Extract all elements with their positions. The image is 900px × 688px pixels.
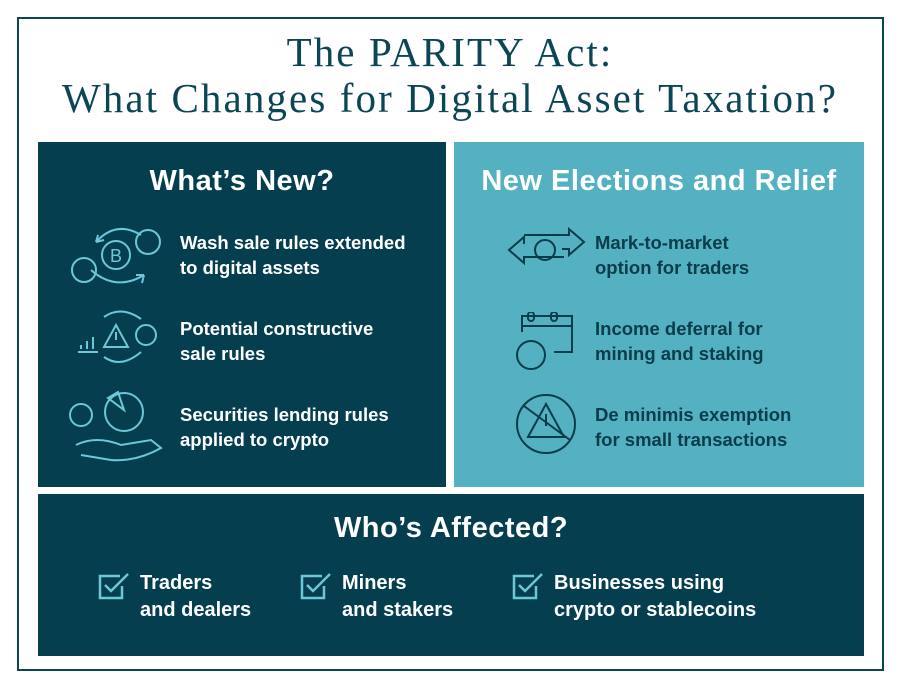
title bbox=[62, 29, 838, 121]
text: lending: Securities lending rules bbox=[180, 404, 389, 425]
text: wash sale bbox=[180, 232, 406, 278]
item: traders: and dealers bbox=[140, 599, 251, 621]
panel: who's affected bbox=[38, 494, 864, 656]
item: miners: and stakers bbox=[342, 599, 453, 621]
text: de minimis: De minimis exemption bbox=[595, 404, 791, 425]
text: income deferral: mining and staking bbox=[595, 343, 764, 364]
text: lending: applied to crypto bbox=[180, 429, 329, 450]
panel: new elections bbox=[454, 142, 864, 487]
text: constructive sale: sale rules bbox=[180, 343, 265, 364]
item: traders: Traders bbox=[140, 572, 212, 594]
text: lending bbox=[180, 404, 389, 450]
text: mark-to-market bbox=[595, 232, 749, 278]
item: businesses: Businesses using bbox=[554, 572, 724, 594]
item: miners: Miners bbox=[342, 572, 406, 594]
heading: new elections: New Elections and Relief bbox=[481, 165, 837, 197]
item: miners bbox=[300, 572, 453, 621]
text: income deferral bbox=[595, 318, 764, 364]
icon: de minimis bbox=[516, 394, 576, 454]
icon: income deferral bbox=[516, 312, 573, 370]
text: wash sale: Wash sale rules extended bbox=[180, 232, 406, 253]
item: businesses: crypto or stablecoins bbox=[554, 599, 756, 621]
heading: what's new: What’s New? bbox=[150, 165, 334, 197]
title: The PARITY Act: bbox=[287, 29, 613, 75]
text: mark-to-market: option for traders bbox=[595, 257, 749, 278]
panel: what's new bbox=[38, 142, 446, 487]
text: income deferral: Income deferral for bbox=[595, 318, 763, 339]
icon: wash sale bbox=[71, 228, 161, 284]
text: de minimis bbox=[595, 404, 791, 450]
text: de minimis: for small transactions bbox=[595, 429, 787, 450]
text: constructive sale bbox=[180, 318, 373, 364]
icon: lending bbox=[69, 390, 163, 462]
heading: who's affected: Who’s Affected? bbox=[334, 512, 568, 544]
icon: wash sale: B bbox=[110, 246, 122, 266]
item: businesses bbox=[512, 572, 756, 621]
item: traders bbox=[98, 572, 251, 621]
text: mark-to-market: Mark-to-market bbox=[595, 232, 729, 253]
text: wash sale: to digital assets bbox=[180, 257, 320, 278]
text: constructive sale: Potential constructive bbox=[180, 318, 373, 339]
icon: mark-to-market bbox=[508, 227, 586, 266]
title: What Changes for Digital Asset Taxation? bbox=[62, 75, 838, 121]
icon: constructive sale bbox=[78, 310, 157, 363]
